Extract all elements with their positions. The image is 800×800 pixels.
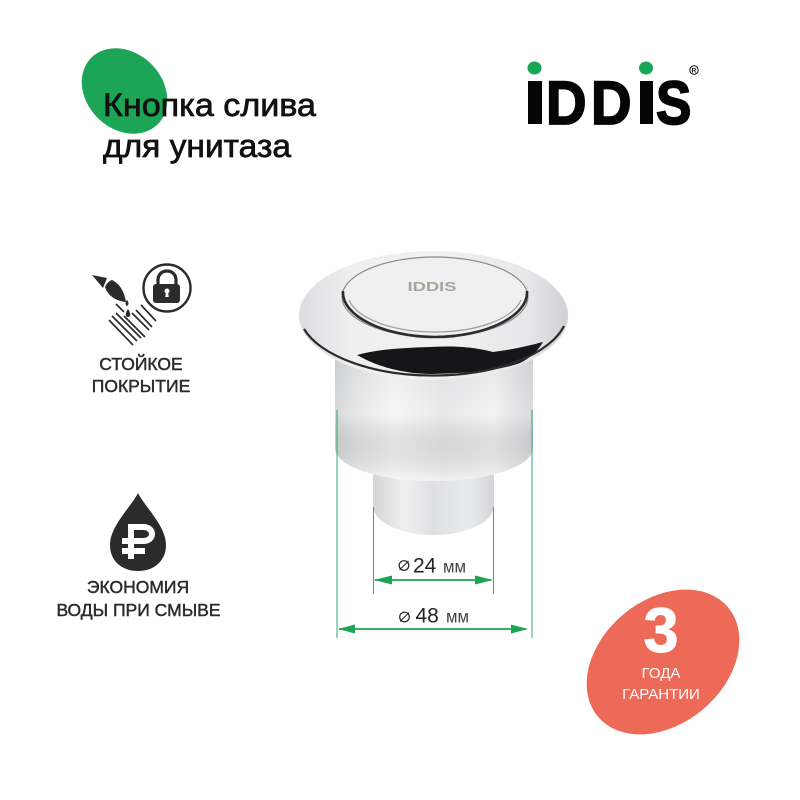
push button	[342, 257, 528, 337]
warranty badge	[558, 560, 768, 764]
main body	[335, 350, 533, 481]
engraved logo: IDDIS	[408, 279, 457, 294]
icon: water drop with ruble	[110, 493, 166, 571]
lower stem	[373, 470, 494, 535]
dimension: 48 mm: 48	[416, 604, 439, 628]
text: durable coating	[92, 353, 190, 396]
text: durable coating: ПОКРЫТИЕ	[92, 376, 190, 396]
warranty badge: ГОДА	[642, 665, 680, 682]
dimension: 48 mm	[337, 410, 532, 638]
brand logo: S	[656, 70, 691, 138]
product: flush button	[299, 251, 568, 535]
push button ring	[343, 291, 527, 337]
icon: brush and lock	[92, 264, 190, 345]
text: durable coating: СТОЙКОЕ	[99, 353, 183, 374]
flange rim edge	[304, 326, 564, 376]
flange	[299, 251, 568, 380]
dimension: 48 mm: мм	[446, 606, 469, 626]
flange reflection	[357, 342, 543, 374]
warranty badge: 3	[643, 596, 679, 666]
title: Кнопка слива	[103, 87, 316, 123]
brand logo	[528, 62, 698, 138]
text: water saving: ВОДЫ ПРИ СМЫВЕ	[56, 600, 221, 620]
green blob behind title	[64, 31, 185, 151]
title: для унитаза	[103, 128, 291, 164]
text: water saving: ЭКОНОМИЯ	[87, 577, 189, 597]
brand logo: D	[546, 70, 587, 138]
warranty badge: ГАРАНТИИ	[622, 686, 700, 703]
title	[103, 87, 316, 164]
text: water saving	[56, 577, 221, 620]
brand logo: R	[692, 68, 697, 74]
brand logo: D	[591, 70, 632, 138]
dimension: 24 mm	[374, 507, 494, 594]
dimension: 24 mm: 24	[413, 554, 437, 578]
dimension: 24 mm: мм	[443, 556, 466, 576]
